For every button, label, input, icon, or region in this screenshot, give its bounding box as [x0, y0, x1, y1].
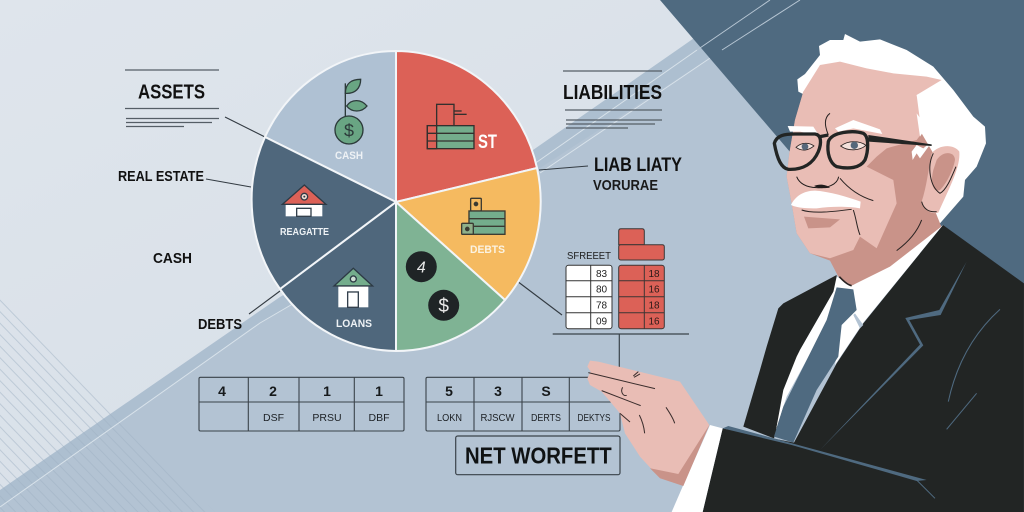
sheet: red table	[619, 265, 664, 329]
icon: red roof house	[282, 185, 326, 216]
sheet: white table: 80	[596, 284, 607, 296]
net worth box: NET WORFETT	[465, 442, 612, 468]
jacket	[703, 225, 1024, 512]
sheet: white table	[566, 265, 612, 329]
net worth box	[456, 436, 620, 475]
sheet title: SFREEET	[567, 250, 612, 262]
pie label: st: ST	[478, 132, 497, 153]
cuff	[672, 425, 723, 512]
icon: number badge: 4	[417, 260, 426, 276]
label: vorurae: VORURAE	[593, 177, 658, 194]
table: left: DSF	[263, 412, 284, 424]
shirt	[827, 225, 943, 365]
table: left: 1	[323, 383, 331, 399]
icon: plant coin	[335, 79, 367, 144]
lapel lines	[820, 262, 967, 450]
icon: dollar badge	[428, 290, 459, 321]
slice: loans	[280, 202, 396, 351]
label: real estate: REAL ESTATE	[118, 168, 204, 185]
jacket and shirt	[587, 225, 1024, 512]
hair	[797, 34, 986, 223]
face light	[787, 62, 942, 258]
heading: liabilities: LIABILITIES	[563, 82, 662, 104]
icon: plant coin: $	[344, 121, 354, 141]
tie	[774, 287, 857, 443]
table: left: DBF	[368, 412, 390, 424]
face shadow base and neck	[787, 92, 941, 286]
table: right: 3	[494, 383, 502, 399]
glasses	[774, 132, 868, 169]
eyes	[796, 143, 814, 150]
sheet: red table: 18	[648, 300, 660, 312]
table: right: S	[541, 383, 551, 399]
eyebrows	[788, 126, 819, 136]
heading: assets: ASSETS	[138, 82, 205, 104]
label: liability: LIAB LIATY	[594, 155, 682, 176]
hand	[587, 361, 709, 485]
sheet: white table: 83	[596, 269, 607, 280]
sheet: red table: 16	[648, 316, 660, 328]
balance sheet	[553, 229, 689, 368]
table: left: PRSU	[312, 412, 342, 424]
table: right: RJSCW	[480, 412, 515, 424]
pie chart	[252, 51, 541, 351]
sheet: red table: 18	[648, 269, 660, 280]
sheet: red blocks	[619, 229, 664, 260]
leader lines	[206, 117, 588, 315]
table: left: 1	[375, 383, 383, 399]
table: right: LOKN	[437, 412, 462, 424]
table: left	[199, 377, 404, 431]
mustache	[791, 191, 861, 208]
sheet: white table: 09	[596, 316, 607, 328]
hair over temple	[912, 140, 933, 160]
table: right: DEKTYS	[578, 412, 610, 424]
sheet: white table: 78	[596, 300, 607, 312]
slice: short term	[396, 51, 537, 202]
table: right	[426, 377, 620, 431]
icon: debts stack	[462, 198, 505, 234]
pie label: cash: CASH	[335, 150, 363, 162]
table: left: 4	[218, 383, 226, 399]
head	[774, 34, 986, 286]
pie label: real estate: REAGATTE	[280, 226, 329, 238]
label: debts: DEBTS	[198, 316, 242, 333]
table: right: 5	[445, 383, 453, 399]
label: cash: CASH	[153, 250, 192, 267]
lip shadow	[804, 217, 840, 228]
heading: assets	[125, 70, 219, 126]
sheet: red table: 16	[648, 284, 660, 296]
nose	[797, 177, 839, 188]
pie label: debts: DEBTS	[470, 244, 505, 256]
table: right: DERTS	[531, 412, 561, 424]
icon: green roof house	[334, 268, 373, 307]
slice: real estate	[252, 137, 396, 289]
figure: man in suit	[587, 34, 1024, 512]
icon: stacked bills	[427, 104, 474, 149]
slice: debts	[396, 168, 541, 300]
heading: liabilities	[563, 71, 662, 128]
shoulder left	[743, 275, 837, 438]
icon: dollar badge: $	[438, 296, 449, 317]
pie label: loans: LOANS	[336, 318, 372, 330]
ear	[922, 146, 959, 213]
slice: cash	[265, 51, 396, 202]
creases	[825, 113, 873, 235]
icon: number badge	[406, 251, 437, 282]
sleeve edge	[723, 426, 927, 481]
table: left: 2	[269, 383, 277, 399]
slice: green	[396, 202, 505, 351]
